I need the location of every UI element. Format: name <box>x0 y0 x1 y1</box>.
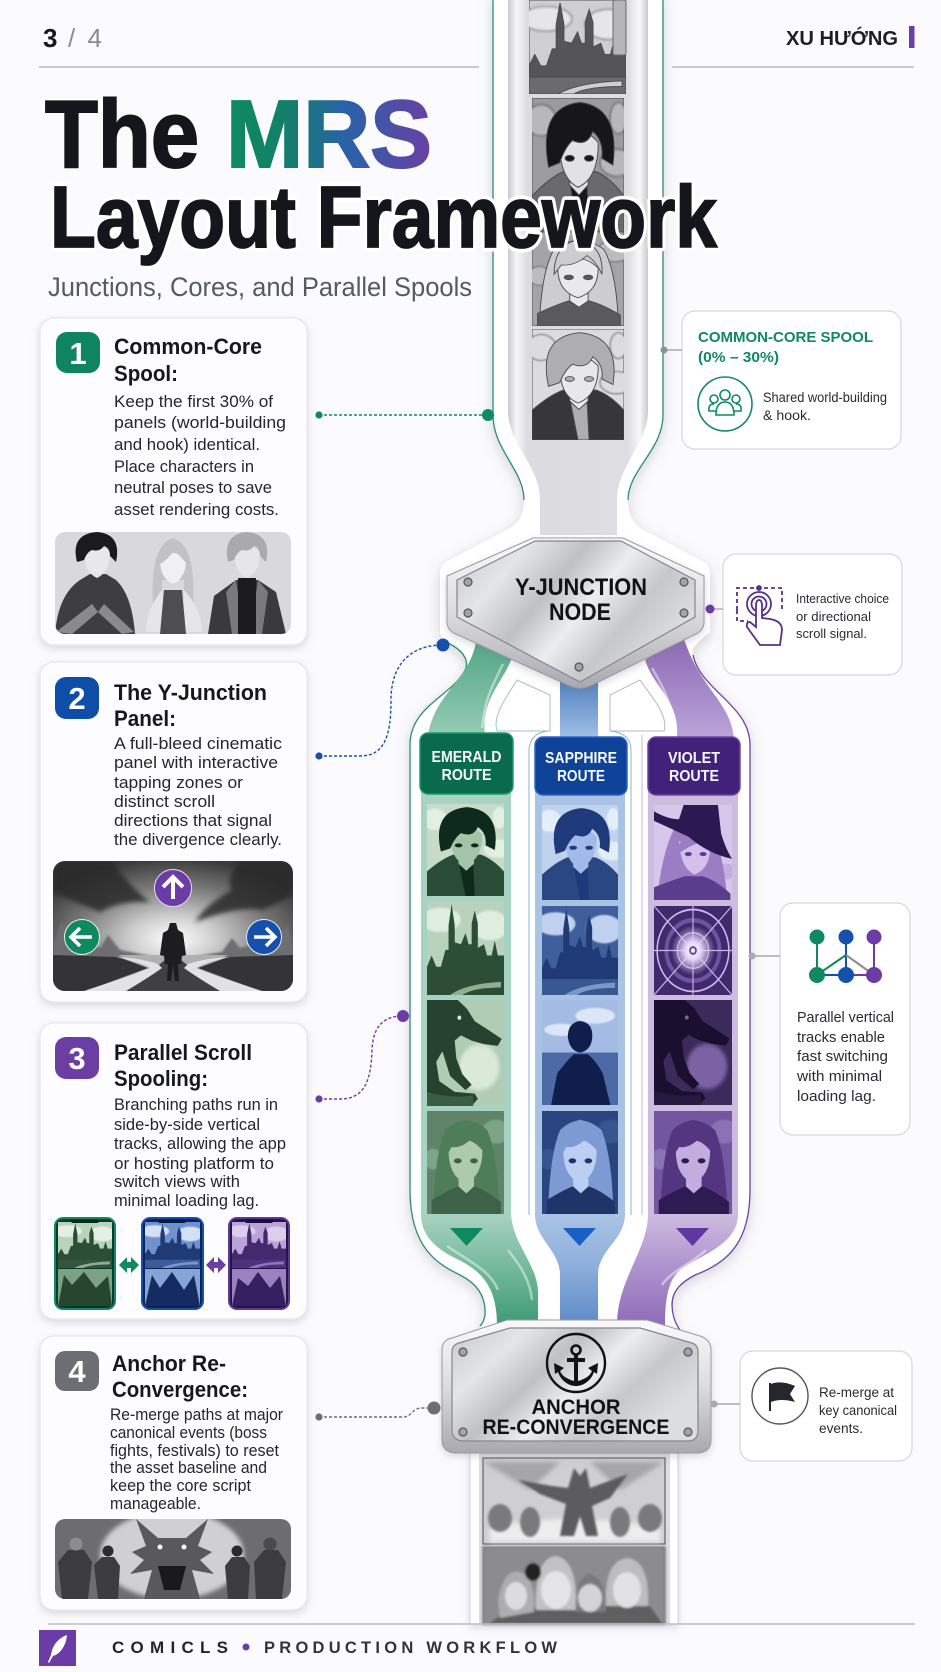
image: crossroads <box>53 861 293 991</box>
image: three characters <box>55 532 291 634</box>
callout: parallel tracks: Parallel vertical <box>797 1009 894 1026</box>
badge 1: 1 <box>69 336 87 371</box>
route header: emerald <box>420 733 513 794</box>
body 3: tracks, allowing the app <box>114 1135 286 1153</box>
body 4: manageable. <box>110 1495 201 1513</box>
icon: parallel graph <box>809 930 882 983</box>
panel: castle <box>521 0 632 94</box>
route header: emerald: ROUTE <box>442 767 492 784</box>
callout: common-core spool: & hook. <box>763 407 811 423</box>
callout: parallel tracks: loading lag. <box>797 1088 876 1105</box>
panel: step 4 anchor re-convergence <box>40 1336 307 1610</box>
callout: re-merge: key canonical <box>819 1402 897 1418</box>
body 4: canonical events (boss <box>110 1424 267 1442</box>
heading 2 <box>114 680 267 731</box>
outline strokes <box>410 0 750 1330</box>
heading 3: Spooling: <box>114 1066 208 1091</box>
central path <box>125 960 221 991</box>
panel: step 3 parallel scroll spooling <box>40 1023 307 1319</box>
metal slot on first panel <box>613 0 626 55</box>
body 4: Re-merge paths at major <box>110 1406 283 1424</box>
title: MRS <box>226 81 432 188</box>
Y-junction node plate: Y-JUNCTION <box>515 574 647 601</box>
common-core panels <box>521 0 633 440</box>
rivets <box>459 1348 692 1436</box>
route header: sapphire: SAPPHIRE <box>545 750 617 767</box>
body 2: distinct scroll <box>114 793 215 811</box>
heroine <box>153 538 193 603</box>
arrow: emerald down <box>450 1228 483 1246</box>
emerald branch top <box>428 636 513 735</box>
header: page counter: 3 <box>43 23 57 53</box>
body 2: tapping zones or <box>114 774 244 792</box>
connector: step 2 to junction <box>315 638 450 760</box>
footer text <box>112 1638 557 1657</box>
body 2: the divergence clearly. <box>114 831 282 849</box>
emerald strip <box>421 780 511 1216</box>
spool track: central flow diagram <box>410 0 750 1330</box>
heading 4: Anchor Re- <box>112 1351 226 1376</box>
fields <box>53 955 293 991</box>
callout: parallel tracks <box>780 903 910 1135</box>
roads <box>84 957 162 991</box>
panel: step 2 the Y-junction panel <box>40 662 307 1002</box>
violet branch top <box>645 636 734 738</box>
body 1: panels (world-building <box>114 413 286 432</box>
anchor re-convergence plate: ANCHOR <box>532 1396 620 1419</box>
figure <box>160 923 186 981</box>
header: page counter: / 4 <box>68 23 102 53</box>
connector: step 4 to anchor <box>315 1402 440 1421</box>
badge 3 <box>55 1037 99 1079</box>
panel: group portrait <box>483 1547 665 1624</box>
body 3: or hosting platform to <box>114 1155 274 1173</box>
header: page counter <box>43 23 102 53</box>
body 4 <box>110 1406 283 1513</box>
callout: re-merge: Re-merge at <box>819 1384 894 1400</box>
badge 4 <box>55 1351 99 1391</box>
route panels: violet <box>651 805 738 1214</box>
Y-junction node plate: NODE <box>549 599 611 626</box>
body 3: side-by-side vertical <box>114 1116 260 1134</box>
route panels: sapphire <box>536 805 626 1214</box>
sapphire strip <box>535 780 625 1216</box>
body 2 <box>114 735 282 849</box>
heading 3 <box>114 1040 252 1091</box>
body 2: directions that signal <box>114 812 272 830</box>
body 4: fights, festivals) to reset <box>110 1442 279 1460</box>
body 3 <box>114 1096 286 1210</box>
rivets <box>464 578 688 671</box>
callout: common-core spool <box>682 311 901 449</box>
blond hero <box>208 580 286 634</box>
body 3: minimal loading lag. <box>114 1192 259 1210</box>
emerald branch bottom <box>421 1214 538 1325</box>
subtitle: Junctions, Cores, and Parallel Spools <box>48 272 472 302</box>
callout: interactive choice: or directional <box>796 610 871 624</box>
callout: common-core spool: Shared world-building <box>763 389 887 405</box>
body 3: Branching paths run in <box>114 1096 278 1114</box>
title <box>45 81 718 266</box>
header rules <box>39 66 914 68</box>
callout: parallel tracks: fast switching <box>797 1048 888 1065</box>
icon: flag <box>752 1368 808 1424</box>
body 2: A full-bleed cinematic <box>114 735 282 753</box>
four fighters <box>58 1538 286 1599</box>
footer rule <box>48 1623 915 1625</box>
body 1: Keep the first 30% of <box>114 392 273 411</box>
body 1: neutral poses to save <box>114 478 272 497</box>
heading 1: Spool: <box>114 361 178 386</box>
phone: sapphire <box>141 1218 203 1309</box>
connector: callout 1 <box>660 346 682 354</box>
icon: left arrow <box>64 920 100 954</box>
mid-ground hills <box>53 922 293 958</box>
island outlines between branches <box>496 680 665 1215</box>
callout: interactive choice: scroll signal. <box>796 627 867 641</box>
white gloss highlights <box>447 664 706 1300</box>
badge 3: 3 <box>68 1041 86 1076</box>
body 1 <box>114 392 286 519</box>
footer text: COMICLS <box>112 1638 228 1657</box>
callout: common-core spool: COMMON-CORE SPOOL <box>698 329 873 346</box>
footer text: PRODUCTION WORKFLOW <box>264 1639 557 1657</box>
violet branch bottom <box>617 1214 738 1325</box>
icon: switch arrow emerald <box>119 1257 139 1273</box>
panel: battle scene <box>483 1458 665 1544</box>
title: Layout Framework <box>50 169 718 266</box>
steel common-core tube <box>508 0 648 535</box>
panel: step 1 common-core spool <box>40 318 307 645</box>
heading 3: Parallel Scroll <box>114 1040 252 1065</box>
callout: re-merge <box>740 1351 912 1461</box>
panel: heroine <box>528 232 631 326</box>
body 2: panel with interactive <box>114 754 278 772</box>
anchor re-convergence plate: RE-CONVERGENCE <box>482 1416 670 1439</box>
connector: callout 4 <box>710 1400 740 1408</box>
violet strip <box>648 780 738 1216</box>
heading 2: The Y-Junction <box>114 680 267 705</box>
panel: blond hero <box>526 329 633 440</box>
route header: emerald: EMERALD <box>432 749 502 766</box>
callout: interactive choice <box>723 554 902 675</box>
icon: up arrow <box>154 870 192 906</box>
white tube envelope <box>410 0 750 1330</box>
hero <box>55 574 135 634</box>
callout: parallel tracks: with minimal <box>796 1068 882 1085</box>
body 1: and hook) identical. <box>114 435 260 454</box>
heading 1 <box>114 334 262 386</box>
phone: emerald <box>54 1218 115 1309</box>
body 4: keep the core script <box>110 1477 251 1495</box>
badge 2 <box>55 677 99 719</box>
anchor re-convergence plate <box>442 1320 711 1453</box>
connector: step 3 to tracks <box>315 1010 409 1103</box>
callout: re-merge: events. <box>819 1420 863 1436</box>
icon: anchor <box>547 1334 605 1392</box>
icon: right arrow <box>246 920 282 954</box>
sapphire branch bottom <box>535 1214 625 1325</box>
bottom common column <box>470 1450 678 1624</box>
route panels: emerald <box>421 804 512 1214</box>
header: section tag: XU HƯỚNG <box>786 26 898 50</box>
route header: violet <box>648 737 740 795</box>
connector: step 1 to tube <box>315 409 494 421</box>
arrow: violet down <box>676 1228 709 1246</box>
Y-junction node plate <box>447 538 704 688</box>
callout: common-core spool: (0% – 30%) <box>698 349 779 366</box>
icon: tap hand <box>737 586 782 645</box>
route header: violet: ROUTE <box>669 768 719 785</box>
icon: switch arrow violet <box>206 1257 226 1273</box>
heading 1: Common-Core <box>114 334 262 359</box>
footer icon: feather <box>39 1630 76 1666</box>
panel: hero <box>526 98 633 232</box>
body 1: Place characters in <box>114 457 254 476</box>
connector: callout 3 <box>748 952 780 960</box>
heading 4: Convergence: <box>112 1377 248 1402</box>
route header: violet: VIOLET <box>668 750 720 767</box>
title: The <box>45 81 199 188</box>
image: dragon boss <box>55 1511 291 1599</box>
route header: sapphire <box>535 737 627 795</box>
body 4: the asset baseline and <box>110 1459 267 1477</box>
badge 2: 2 <box>68 681 86 716</box>
connector: callout 2 <box>706 604 723 614</box>
callout: parallel tracks: tracks enable <box>797 1029 885 1046</box>
badge 1 <box>56 332 100 373</box>
sapphire branch top <box>560 680 598 738</box>
route header: sapphire: ROUTE <box>557 768 605 785</box>
heading 4 <box>112 1351 248 1402</box>
title: Layout Framework <box>50 169 718 266</box>
phone: violet <box>228 1218 289 1309</box>
body 1: asset rendering costs. <box>114 500 279 519</box>
arrow: sapphire down <box>563 1228 596 1246</box>
heading 2: Panel: <box>114 706 176 731</box>
callout: interactive choice: Interactive choice <box>796 592 889 606</box>
icon: people <box>698 377 752 431</box>
badge 4: 4 <box>68 1354 86 1389</box>
body 3: switch views with <box>114 1173 240 1191</box>
